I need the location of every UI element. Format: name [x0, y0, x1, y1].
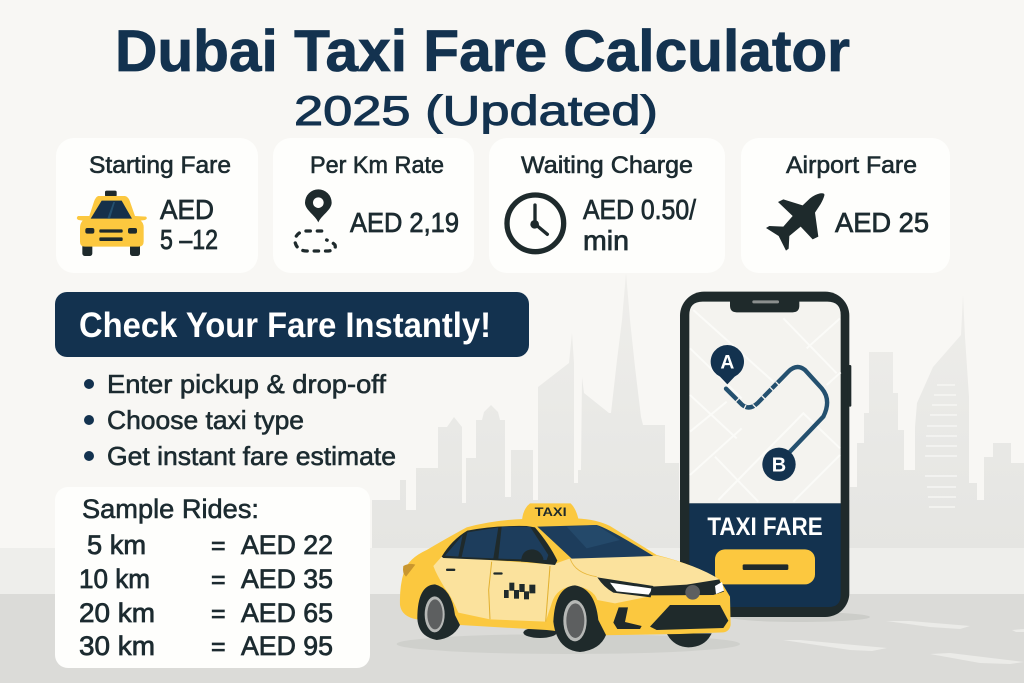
phone map screen — [689, 302, 841, 503]
value: waiting charge — [583, 194, 696, 256]
value: waiting charge: AED 0.50/ — [583, 194, 696, 225]
door handles and tail light — [403, 564, 503, 577]
title: Dubai Taxi Fare Calculator — [115, 19, 850, 84]
row: 30 km: = — [211, 633, 226, 661]
door panels — [433, 557, 553, 622]
pin B: B — [772, 455, 786, 477]
fare panel — [689, 503, 841, 607]
value: airport fare: AED 25 — [835, 207, 929, 238]
icon: map pin and dashed route — [295, 189, 335, 251]
row: 20 km: 20 km — [79, 598, 155, 628]
phone shadow — [730, 612, 870, 622]
row: 5 km: 5 km — [87, 530, 146, 560]
phone notch — [730, 301, 799, 312]
row: 30 km: AED 95 — [241, 631, 333, 661]
row: 30 km: 30 km — [79, 631, 155, 661]
road — [0, 594, 1024, 683]
value: starting fare — [160, 194, 218, 255]
bullet list: Get instant fare estimate — [107, 441, 396, 471]
pin B — [762, 448, 796, 481]
row: 30 km — [79, 631, 333, 661]
card: airport fare — [741, 138, 950, 273]
headlight — [597, 577, 653, 597]
far wheels — [523, 627, 712, 647]
front wheel — [553, 585, 606, 652]
roof sign — [522, 503, 579, 520]
subtitle: 2025 (Updated) — [294, 87, 658, 134]
pin A: A — [720, 352, 734, 373]
car shadow — [397, 634, 740, 654]
panel: sample rides — [55, 487, 370, 668]
hood and fender — [546, 556, 719, 622]
bumper intakes — [613, 605, 728, 630]
value: starting fare: AED — [160, 194, 214, 225]
banner text: Check Your Fare Instantly! — [79, 306, 491, 345]
value: per km rate: AED 2,19 — [350, 207, 459, 238]
row: 10 km: 10 km — [79, 564, 150, 594]
taxi car — [397, 503, 740, 654]
banner: check your fare — [55, 292, 529, 357]
row: 10 km: = — [211, 566, 226, 594]
row: 20 km: AED 65 — [241, 598, 333, 628]
bullet list: Choose taxi type — [107, 405, 304, 435]
front grille band — [650, 579, 724, 600]
fare label: TAXI FARE — [707, 513, 823, 541]
icon: taxi front — [77, 191, 147, 256]
row: 5 km: AED 22 — [241, 530, 333, 560]
card: waiting charge — [489, 138, 725, 273]
row: 5 km — [87, 530, 333, 560]
rear wheel — [417, 584, 460, 640]
phone — [680, 292, 851, 617]
side windows — [442, 526, 557, 565]
roof sign: TAXI — [535, 505, 567, 519]
row: 10 km — [79, 564, 333, 594]
icon: clock — [507, 195, 564, 252]
card: starting fare — [56, 138, 258, 273]
value: starting fare: 5 –12 — [160, 224, 218, 255]
bullet list: Enter pickup & drop-off — [107, 369, 387, 399]
row: 20 km: = — [211, 600, 226, 628]
row: 20 km — [79, 598, 333, 628]
pin A — [711, 345, 744, 384]
bullet list — [84, 369, 396, 471]
card: per km rate — [273, 138, 474, 273]
card heading: starting fare: Starting Fare — [89, 152, 231, 179]
card heading: airport fare: Airport Fare — [786, 152, 917, 179]
windshield — [537, 525, 653, 559]
sample rides heading: Sample Rides: — [82, 494, 259, 524]
card heading: per km rate: Per Km Rate — [310, 152, 444, 179]
icon: airplane — [766, 193, 824, 251]
card heading: waiting charge: Waiting Charge — [521, 152, 693, 179]
row: 10 km: AED 35 — [241, 564, 333, 594]
row: 5 km: = — [211, 532, 226, 560]
route line — [726, 367, 827, 452]
fare button — [715, 549, 815, 584]
skyline — [372, 273, 1024, 548]
car body — [400, 518, 731, 635]
ground band — [0, 548, 1024, 594]
checker pattern — [504, 583, 535, 599]
value: waiting charge: min — [583, 225, 629, 256]
